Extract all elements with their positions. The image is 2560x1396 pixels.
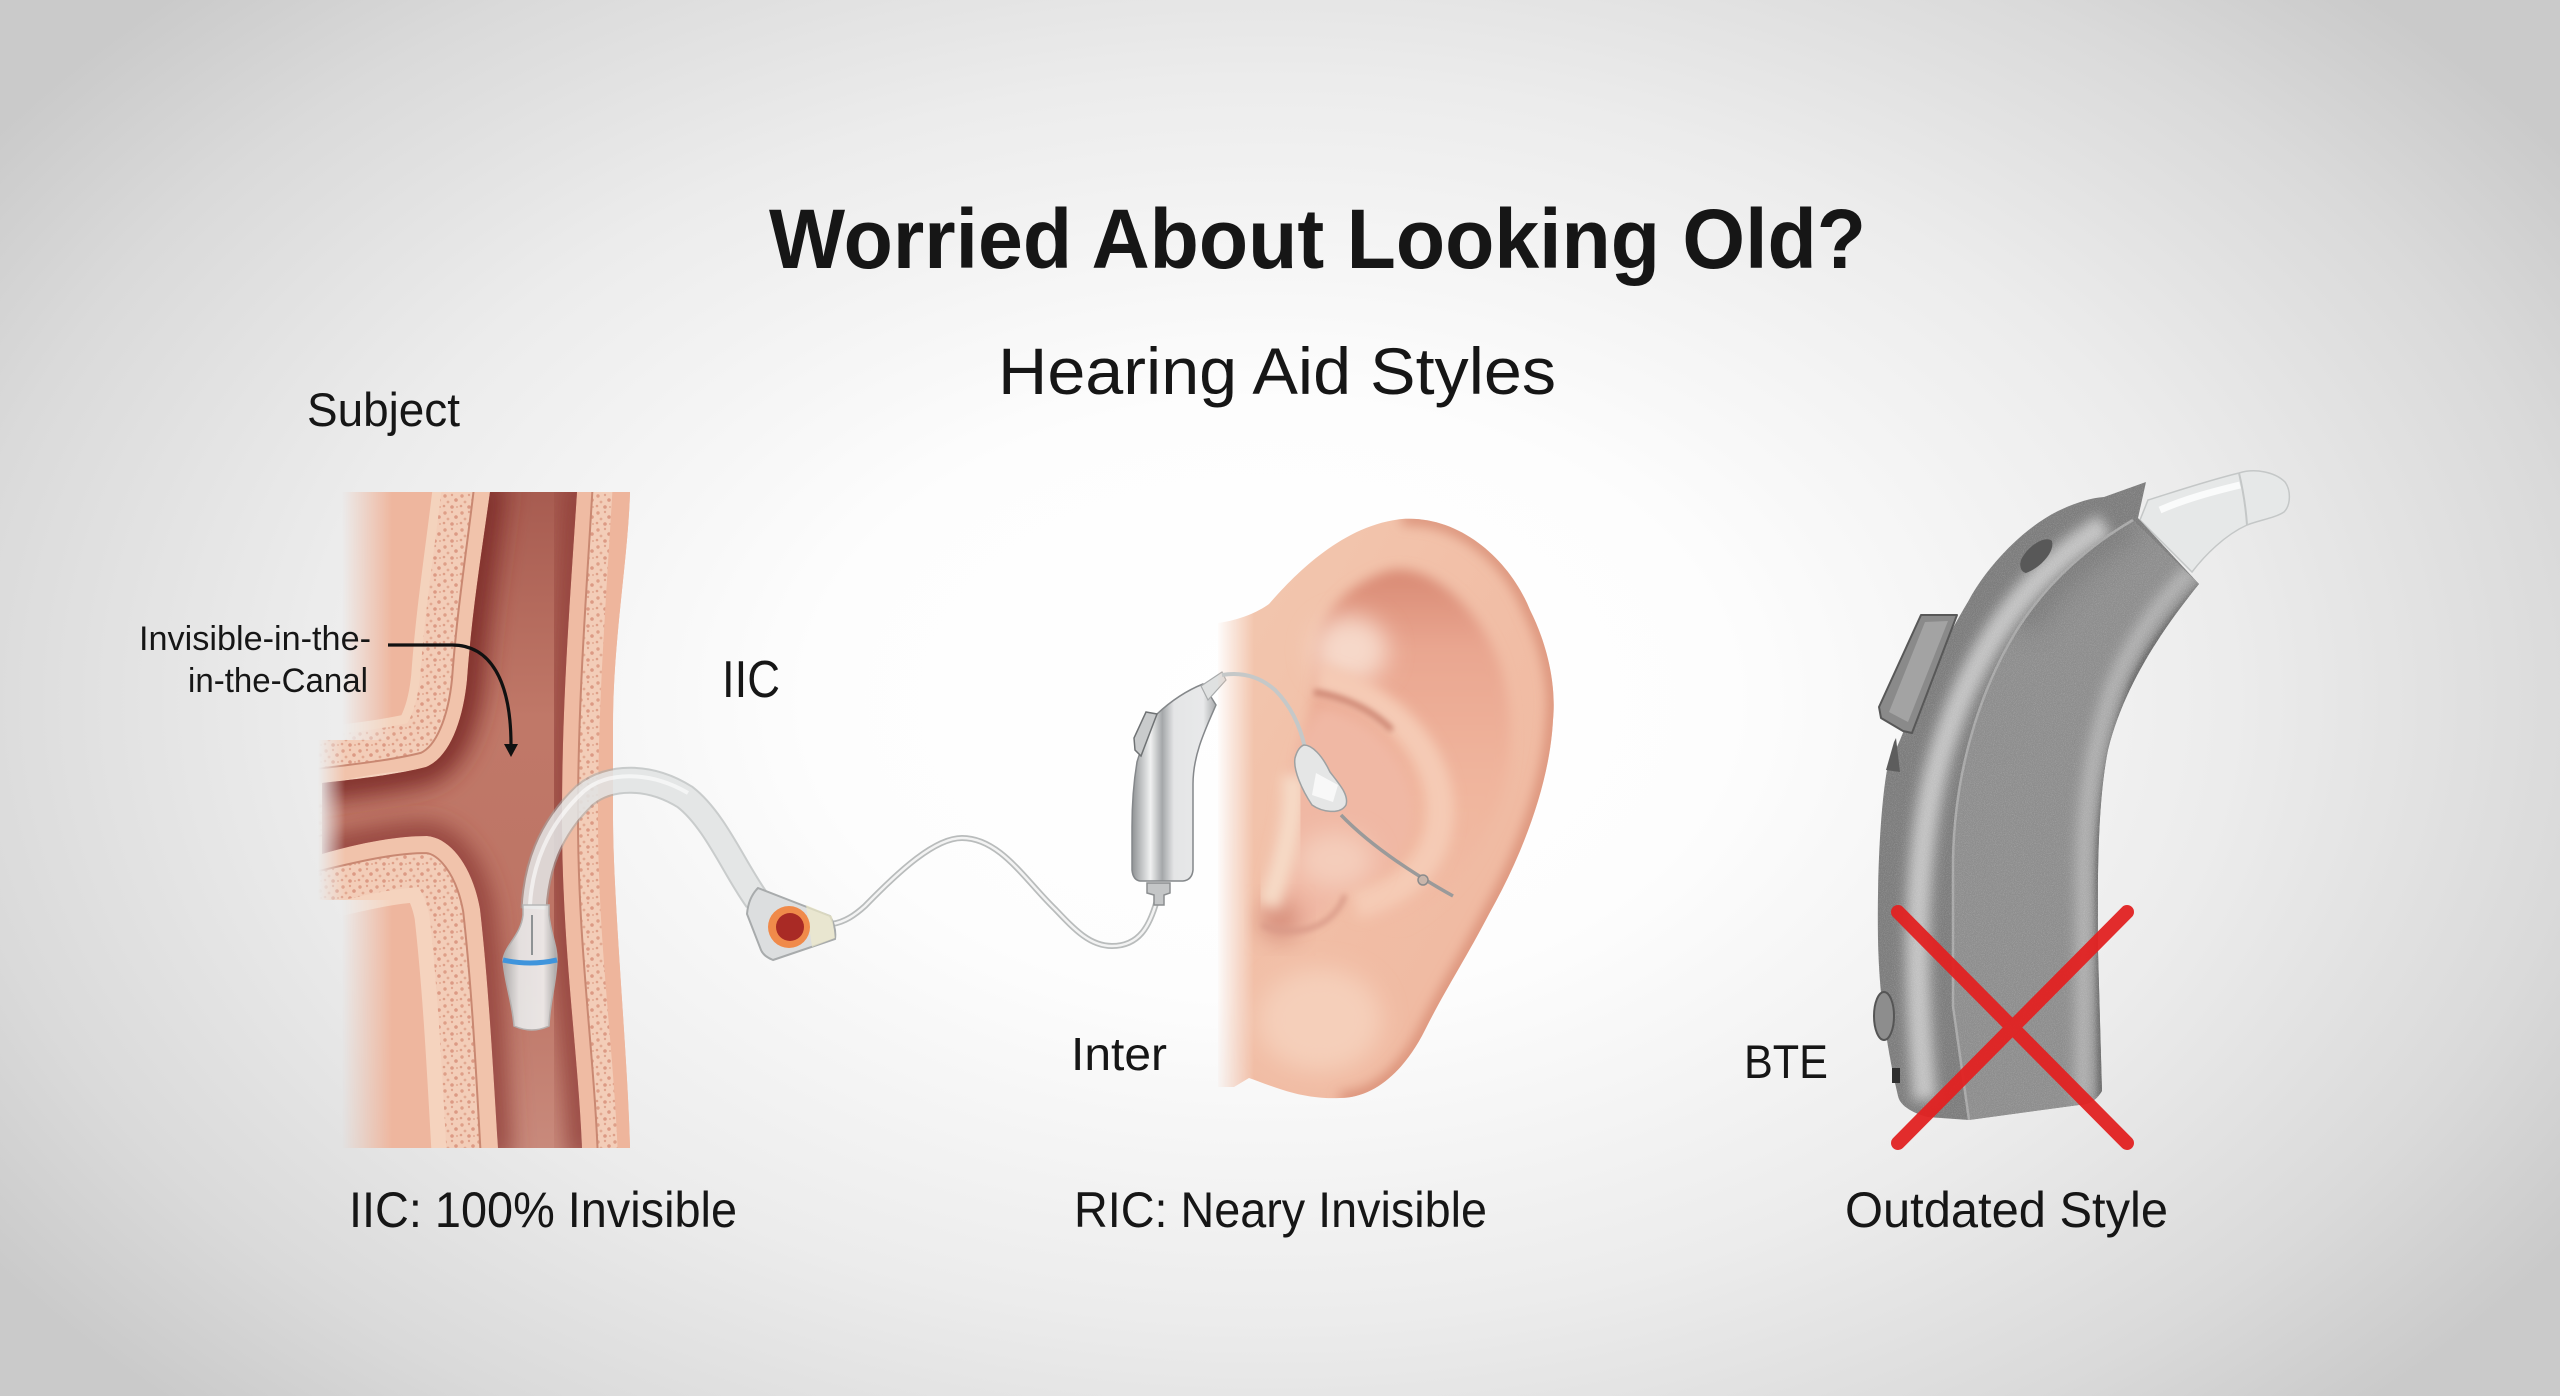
callout label: invisible in the canal: in-the-Canal [188, 662, 368, 700]
callout label: invisible in the canal [139, 620, 371, 700]
canal lumen [322, 492, 582, 1148]
BTE hearing aid [1870, 471, 2289, 1130]
top button [2020, 539, 2052, 573]
lobe highlight [1258, 968, 1382, 1072]
scapha [1308, 564, 1508, 782]
inter label: Inter [1071, 1028, 1167, 1080]
IIC hearing device [503, 776, 835, 1030]
caption: RIC: RIC: Neary Invisible [1074, 1182, 1487, 1238]
caption: IIC: IIC: 100% Invisible [349, 1182, 737, 1238]
body [1878, 482, 2199, 1120]
callout label: invisible in the canal: Invisible-in-the- [139, 620, 371, 658]
lower tissue layers [300, 836, 498, 1160]
arrow: callout to canal [388, 645, 518, 757]
side highlight [1918, 525, 2105, 1100]
right wall layers [613, 493, 630, 1146]
upper tissue layers [323, 492, 490, 782]
connecting wire [832, 838, 1157, 946]
tragus highlight [1268, 775, 1293, 905]
body [1132, 684, 1216, 881]
lower dial [1874, 992, 1894, 1040]
front panel [1954, 521, 2199, 1120]
caption: outdated style: Outdated Style [1845, 1182, 2168, 1238]
RIC hearing device behind ear [1132, 672, 1226, 905]
transparent tube [530, 776, 757, 909]
illustration: ear canal cross-section [320, 492, 630, 1148]
connector [1147, 883, 1170, 905]
canal wire [1341, 815, 1453, 896]
ear illustration [1218, 519, 1554, 1098]
subtitle: Hearing Aid Styles [998, 334, 1556, 408]
port [1892, 1068, 1900, 1083]
BTE label: BTE [1744, 1035, 1828, 1088]
title: Worried About Looking Old? [769, 192, 1866, 286]
earbud [503, 905, 557, 1030]
grain [1870, 480, 2210, 1130]
antihelix [1318, 678, 1440, 905]
receiver dome [1295, 745, 1347, 811]
rim shadow [1340, 519, 1554, 1098]
receiver block [747, 888, 835, 960]
tube tip [1201, 672, 1226, 700]
side button [1134, 712, 1157, 756]
subject label: Subject [307, 383, 460, 436]
fold shadow [1314, 692, 1392, 730]
RIC receiver wire and dome [1222, 674, 1453, 896]
red cross [1898, 912, 2127, 1143]
rocker button [1879, 615, 1957, 772]
concha bowl [1300, 710, 1394, 826]
earhook [2140, 471, 2289, 572]
IIC label: IIC [722, 651, 780, 709]
